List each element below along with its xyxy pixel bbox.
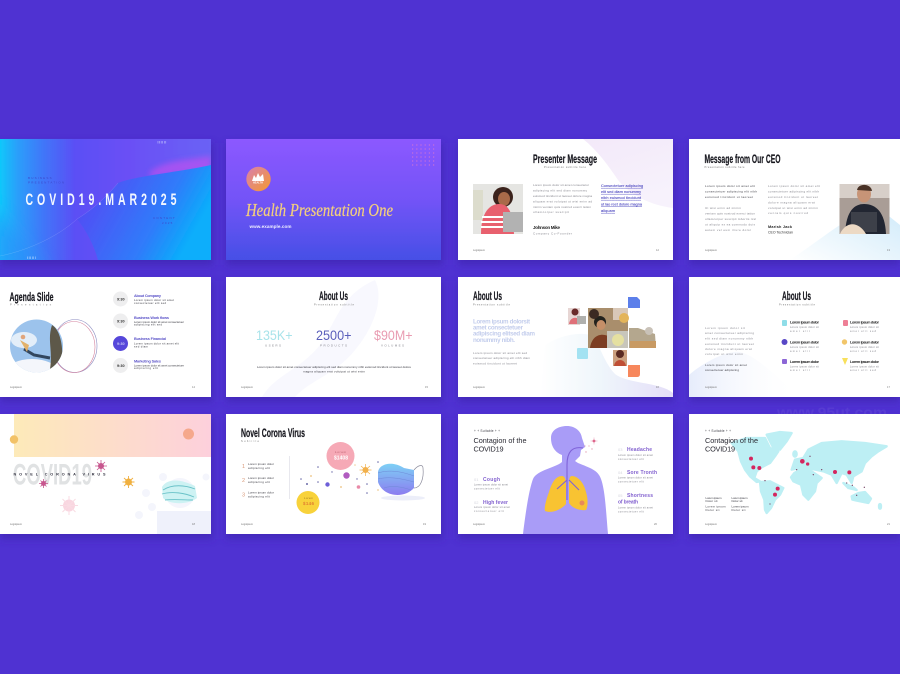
stats description: Lorem ipsum dolor sit amet consectetuer adipiscing elit sed diam nonummy nibh euismod tincidunt ut laoreet dolore (257, 365, 411, 369)
slide: About Us features: consectetuer adipiscing (705, 368, 739, 372)
lungs (545, 476, 588, 512)
symptom numbers: 05 (618, 493, 623, 498)
scattered virus particles (300, 461, 379, 494)
symptom labels: Shortness (627, 493, 653, 499)
tinted lead text (473, 318, 535, 344)
stats description: magna aliquam erat volutpat ut wisi enim (303, 370, 366, 374)
slide: About Us features: amet elit (790, 349, 810, 353)
website: www.example.com (248, 224, 292, 229)
footer: Logoipsum (241, 385, 253, 389)
team body text: consectetuer adipiscing elit nibh diam (473, 356, 530, 360)
cover small text: PRESENTATION (28, 180, 65, 184)
feature intro text (705, 326, 754, 356)
footer: 14 (192, 385, 195, 389)
slide: About Us features: Lorem ipsum dolor sit (850, 364, 879, 368)
slide: About Us stats (226, 277, 441, 397)
pink stat bubble: $1408 (334, 456, 348, 462)
slide: About Us features: Lorem ipsum dolor sit (790, 345, 819, 349)
presenter highlight: ut lao reet dolore magna (601, 202, 643, 206)
numbered list (242, 462, 274, 498)
yellow stat bubble: $146 (303, 501, 314, 506)
agenda items: Lorem ipsum dolor sit amet consectetuer (134, 320, 184, 324)
footer: 12 (656, 248, 659, 252)
numbered list: adipiscing elit (248, 480, 270, 484)
slide shadows (0, 143, 900, 539)
map legend: Dolor sit (732, 508, 746, 512)
slide: Presenter Message: Presentation subtitle here (544, 165, 587, 169)
feature labels: Lorem ipsum dolor (850, 360, 880, 364)
presenter body text: Lorem ipsum dolor sit amet consectetur (533, 183, 589, 187)
feature labels: Lorem ipsum dolor (790, 340, 820, 344)
agenda items: 9:30 (117, 320, 125, 324)
footer: 19 (423, 522, 426, 526)
mask (162, 480, 197, 503)
feature intro text: euismod tincidunt ut laoreet (705, 342, 754, 346)
numbered list: 2 (242, 478, 245, 484)
stats (256, 327, 412, 348)
footer (705, 522, 890, 526)
cover tick marks (27, 140, 167, 260)
footer (473, 522, 657, 526)
feature intro text: dolore magna aliquam erat (705, 347, 752, 351)
logo: HEALTH (253, 182, 263, 184)
cover tick marks: IIIIII (158, 140, 167, 144)
footer: Logoipsum (10, 385, 22, 389)
climber photo (10, 320, 63, 372)
slide: About Us features: Lorem ipsum dolor sit amet (705, 363, 747, 367)
heading: Presenter Message (533, 154, 597, 166)
slide: About Us features (689, 277, 900, 397)
symptom descriptions: consectetuer elit (474, 486, 500, 490)
photo: woman with laptop (473, 184, 523, 234)
script title: Health Presentation One (245, 200, 393, 220)
symptom labels (483, 447, 657, 506)
CEO text: consectetuer adipiscing elit nibh (705, 190, 757, 194)
agenda items: About Company (134, 294, 162, 298)
CEO text (705, 185, 757, 198)
presenter body text: adipiscing elit sed diam nonummy (533, 188, 588, 192)
feature labels: Lorem ipsum dolor (850, 340, 880, 344)
slide: About Us team: Presentation subtitle (473, 302, 511, 306)
heading: Contagion of the (705, 436, 758, 445)
agenda items: Lorem ipsum dolor sit amet (134, 298, 174, 302)
map legend: Lorem ipsum (706, 504, 726, 508)
footer: 18 (192, 522, 195, 526)
presenter highlight: elit sed diam nonummy (601, 190, 641, 194)
feature icons (782, 320, 848, 365)
tinted lead text: nonummy nibh. (473, 337, 515, 344)
slide: Agenda: Presentation (10, 302, 52, 306)
feature labels: Lorem ipsum dolor (790, 320, 820, 324)
cover small text: CONTENT (153, 216, 176, 220)
stats: VOLUMES (381, 344, 405, 348)
presenter highlight (601, 184, 643, 213)
presenter highlight: Consectetuer adipiscing (601, 184, 643, 188)
slide: Message from Our CEO: CEO Technician (768, 230, 793, 234)
pink stat bubble (326, 442, 354, 470)
slide: Contagion world map (689, 414, 900, 534)
big title: COVID19 (13, 458, 92, 492)
heading: Agenda Slide (10, 292, 54, 304)
eyebrow: + + Suitable + + (474, 429, 500, 433)
slide: Contagion body (458, 414, 673, 534)
stats: 2500+ (316, 327, 352, 343)
map hotspots (749, 456, 865, 505)
footer: Logoipsum (705, 522, 717, 526)
team body text (473, 352, 530, 364)
rings (53, 320, 97, 372)
dot grid (412, 145, 437, 165)
footer (473, 249, 659, 252)
slide: Message from Our CEO: consectetuer adipiscing elit nibh (768, 190, 819, 194)
symptom descriptions: consectetuer elit (618, 510, 644, 514)
agenda items: Business Financial (134, 337, 166, 341)
cover tick marks: IIIIII (27, 256, 36, 260)
photo collage (568, 308, 656, 366)
footer: Logoipsum (241, 522, 253, 526)
footer (10, 523, 195, 526)
virus icons (10, 428, 194, 515)
symptom descriptions: Lorem ipsum dolor sit amet (474, 482, 508, 486)
symptom descriptions: Lorem ipsum dolor sit amet (474, 505, 510, 509)
symptom labels: of breath (618, 500, 638, 506)
agenda items: sed diam (134, 344, 149, 348)
slide: About Us features: Presentation subtitle (779, 302, 816, 306)
colored squares (577, 297, 640, 377)
agenda items: adipiscing elit sed (134, 322, 162, 326)
map legend: Dolor sit (732, 499, 743, 503)
feature labels: Lorem ipsum dolor (850, 320, 880, 324)
yellow stat bubble: Lorem (304, 496, 314, 500)
tinted lead text: amet consectetuer (473, 324, 524, 332)
logo (246, 167, 271, 191)
symptom descriptions: Lorem ipsum dolor sit amet (618, 476, 653, 480)
symptom descriptions (474, 453, 653, 514)
slide: About Us features: amet elit sed (850, 368, 877, 372)
agenda items: Marketing Sales (134, 360, 161, 364)
slide: About Us stats: Presentation subtitle (314, 302, 355, 306)
faded virus backdrop (135, 473, 211, 534)
slide: Message from Our CEO: Presentation subtitle here (704, 165, 745, 169)
presenter body text: euismod tincidunt ut laoreet dolore magna (533, 194, 592, 198)
footer: 13 (887, 248, 890, 252)
presenter body text: aliquam erat volutpat ut wisi enim ad (533, 200, 592, 204)
slide: Message from Our CEO: veniam quis nostrud (768, 211, 808, 215)
symptom labels: Headache (627, 447, 652, 453)
heading: About Us (319, 291, 348, 303)
stats: 135K+ (256, 327, 292, 343)
slide: COVID19 cover (0, 139, 211, 270)
feature intro text: elit sed diam nonummy nibh (705, 336, 753, 340)
cover small text (28, 176, 176, 225)
slide: Message from Our CEO: dolore magna aliquam erat (768, 200, 815, 204)
cover title: COVID19.MAR2025 (26, 189, 177, 209)
yellow stat bubble (296, 491, 320, 514)
symptom numbers: 02 (474, 500, 479, 505)
slide: About Us team (458, 277, 673, 397)
numbered list: 3 (242, 492, 245, 498)
footer: Logoipsum (473, 522, 485, 526)
slide: About Us features: amet elit sed (850, 329, 877, 333)
map legend: Lorem ipsum (706, 496, 722, 500)
symptom numbers: 03 (618, 447, 623, 452)
cover small text: BUSINESS (28, 176, 53, 180)
airway (557, 448, 583, 500)
symptom labels: Sore Tronth (627, 470, 657, 476)
map legend (706, 496, 749, 512)
numbered list: Lorem ipsum dolor (248, 490, 274, 494)
footer (705, 249, 890, 252)
slide: About Us features: Lorem ipsum dolor sit (790, 325, 819, 329)
eyebrow: + + Suitable + + (705, 429, 731, 433)
footer: 21 (887, 522, 890, 526)
presenter body text: minim veniam quis nostrud exerci tation (533, 205, 591, 209)
heading: Contagion of the (474, 436, 526, 445)
pink stat bubble: Lorem (335, 450, 347, 454)
presenter name: Johnson Mike (533, 225, 560, 230)
subtitle: NOVEL CORONA VIRUS (14, 472, 106, 476)
human silhouette (523, 426, 608, 534)
footer: Logoipsum (10, 522, 22, 526)
slide: Presenter Message: Company Co-Founder (533, 232, 572, 236)
map legend: Lorem ipsum (732, 504, 749, 508)
stats description (257, 365, 411, 374)
feature labels: Lorem ipsum dolor (790, 360, 820, 364)
symptom descriptions: consectetuer elit (618, 480, 644, 484)
footer (241, 385, 428, 389)
slide: Message from Our CEO: autem vel eum iriure dolor (705, 228, 751, 232)
footer: 20 (654, 522, 657, 526)
slide: COVID19 section (0, 414, 211, 534)
slide: Message from Our CEO: Ut wisi enim ad minim (705, 206, 742, 210)
symptom numbers: 04 (618, 470, 623, 475)
slide: About Us features: Lorem ipsum dolor sit (790, 364, 819, 368)
numbered list: 1 (242, 464, 245, 470)
map legend: Dolor sit (706, 499, 718, 503)
footer (241, 522, 426, 526)
slide: Message from Our CEO: ut aliquip ex ea commodo duis (705, 222, 756, 226)
feature labels (790, 320, 880, 364)
slide: About Us features: Lorem ipsum dolor sit (850, 325, 879, 329)
symptom descriptions: consectetuer elit (618, 457, 644, 461)
slide: Message from Our CEO: volutpat ut wisi enim ad minim (768, 206, 818, 210)
slide: Message from Our CEO: ullamcorper suscipit lobortis nisl (705, 217, 756, 221)
map legend: Lorem ipsum (732, 496, 748, 500)
watermark: www.95ut.com (776, 404, 887, 420)
footer: Logoipsum (473, 385, 485, 389)
footer: 17 (887, 385, 890, 389)
blue mask (378, 464, 425, 500)
symptom numbers: 01 (474, 477, 479, 482)
footer (473, 386, 659, 388)
feature intro text: Lorem ipsum dolor sit (705, 326, 745, 330)
agenda items (113, 292, 184, 373)
numbered list: Lorem ipsum dolor (248, 476, 274, 480)
slide: Presenter Message (458, 139, 673, 260)
map legend: Dolor sit (706, 508, 720, 512)
numbered list: adipiscing elit (248, 466, 270, 470)
footer: Logoipsum (705, 385, 717, 389)
stats: PRODUCTS (320, 344, 348, 348)
slide: Message from Our CEO (689, 139, 900, 260)
agenda items: 9:30 (117, 364, 125, 368)
presenter highlight: nibh euismod tincidunt (601, 196, 642, 200)
slide: Novel Corona Virus: Subtitle (241, 439, 260, 443)
presenter body text (533, 183, 592, 214)
slide: About Us features: amet elit sed (850, 349, 877, 353)
CEO text: euismod tincidunt ut laoreet (705, 195, 753, 199)
heading: About Us (473, 291, 502, 303)
footer: Logoipsum (473, 248, 485, 252)
footer: 15 (425, 385, 428, 389)
agenda items: 9:30 (117, 298, 125, 302)
slide: Contagion world map: COVID19 (705, 444, 735, 454)
slide: Message from Our CEO: euismod tincidunt ut laoreet (768, 195, 818, 199)
team body text: Lorem ipsum dolor sit amet elit sed (473, 351, 527, 355)
agenda items: Lorem ipsum dolor sit amet elit (134, 342, 179, 346)
footer (10, 385, 195, 389)
stats: USERS (265, 344, 282, 348)
numbered list: adipiscing elit (248, 494, 270, 498)
world map (732, 432, 887, 513)
CEO name: Marish Jack (768, 225, 793, 229)
agenda items: Lorem ipsum dolor sit amet consectetuer (134, 364, 184, 368)
symptom labels: Cough (483, 477, 500, 483)
footer (705, 386, 890, 388)
symptom descriptions: consectetuer elit (474, 509, 504, 513)
numbered list: Lorem ipsum dolor (248, 462, 274, 466)
symptom descriptions: Lorem ipsum dolor sit amet (618, 453, 653, 457)
footer: Logoipsum (705, 248, 717, 252)
photo: CEO (840, 184, 890, 234)
slide: About Us features: Lorem ipsum dolor sit (850, 345, 879, 349)
tinted lead text: Lorem ipsum dolorsit (473, 318, 530, 326)
agenda items: Business Work flows (134, 316, 169, 320)
peach banner (14, 414, 211, 457)
symptom labels: High fever (483, 500, 508, 506)
heading: Novel Corona Virus (241, 428, 305, 440)
agenda items: adipiscing elit (134, 366, 158, 370)
stats: $90M+ (374, 327, 412, 343)
tinted lead text: adipiscing elitsed diam (473, 330, 535, 338)
agenda items: 9:30 (117, 342, 125, 346)
heading: Message from Our CEO (704, 154, 781, 166)
symptom numbers (474, 447, 623, 505)
feature intro text: amet consectetuer adipiscing (705, 331, 754, 335)
slide: Contagion body: COVID19 (474, 444, 504, 454)
slide: Health Presentation One (226, 139, 441, 260)
droplets (584, 438, 598, 453)
team body text: euismod tincidunt ut laoreet (473, 362, 517, 366)
feature intro text: volutpat ut wisi enim (705, 352, 744, 356)
slide: Message from Our CEO: Lorem ipsum dolor sit amet elit (768, 184, 820, 188)
CEO text: Lorem ipsum dolor sit amet elit (705, 184, 755, 188)
divider (288, 456, 291, 499)
cover small text: 2025 (162, 221, 173, 225)
heading: About Us (782, 291, 811, 303)
symptom descriptions: Lorem ipsum dolor sit amet (618, 506, 653, 510)
agenda items: consectetuer elit sed (134, 301, 166, 305)
slide: Message from Our CEO: veniam quis nostrud exerci tation (705, 212, 755, 216)
slide: Novel Corona Virus (226, 414, 441, 534)
slide: About Us features: amet elit (790, 329, 810, 333)
presenter body text: ullamcorper suscipit (533, 210, 569, 214)
slide: About Us features: amet elit (790, 368, 810, 372)
slide: Agenda (0, 277, 211, 397)
footer: 16 (656, 385, 659, 389)
presenter highlight: aliquam (601, 209, 615, 213)
